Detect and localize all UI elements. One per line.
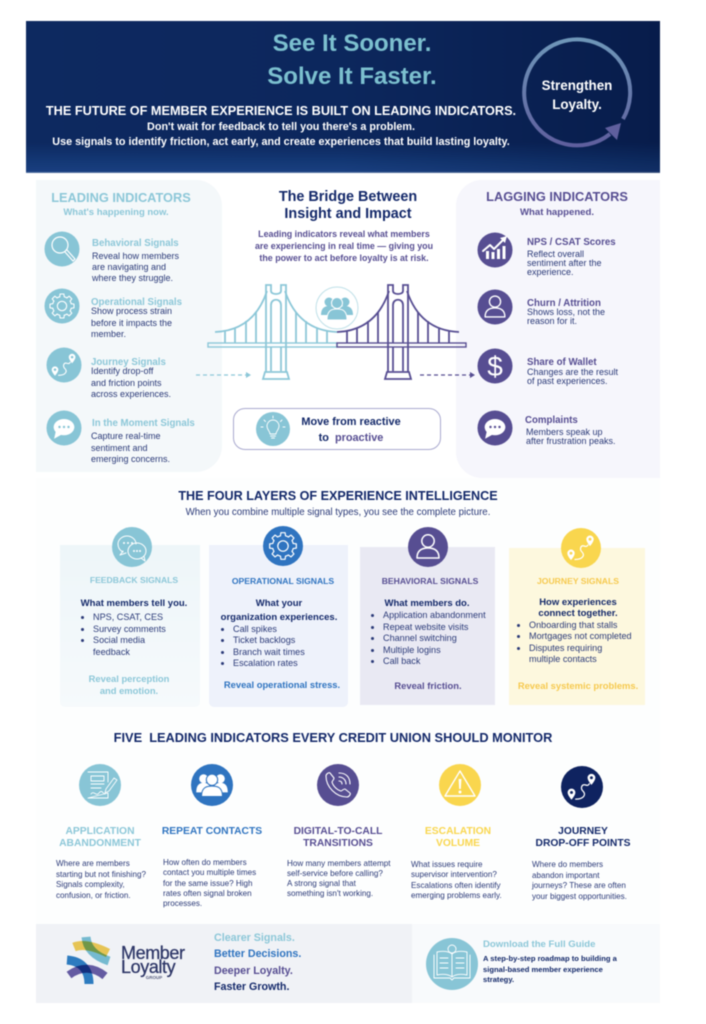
text: processes. <box>163 899 202 908</box>
text: A step-by-step roadmap to building a <box>483 954 617 963</box>
question <box>538 598 618 619</box>
subheading: What happened. <box>520 207 594 218</box>
text <box>287 859 390 899</box>
card: feedback signals <box>60 526 200 696</box>
heading <box>294 826 382 850</box>
text: to proactive <box>319 432 383 444</box>
icon: group in circle <box>315 286 359 330</box>
icon: person <box>476 288 514 326</box>
arrow: into bridge <box>196 372 252 378</box>
text <box>526 307 606 326</box>
tagline: Use signals to identify friction, act early, and create experiences that build lasting loyalty. <box>52 136 510 148</box>
item: complaints <box>476 410 616 446</box>
text <box>411 860 502 902</box>
title <box>267 30 437 90</box>
text: your biggest opportunities. <box>532 892 627 901</box>
list <box>529 620 632 665</box>
card: operational signals <box>209 526 348 707</box>
text: starting but not finishing? <box>56 870 146 879</box>
text <box>526 248 602 278</box>
text: Shows loss, not the <box>527 307 605 317</box>
text: bridge intro: Leading indicators reveal what members <box>258 229 430 239</box>
takeaway: Reveal systemic problems. <box>518 680 638 691</box>
text: sentiment and <box>91 442 148 452</box>
list: Multiple logins <box>383 644 441 654</box>
heading: VOLUME <box>436 838 480 849</box>
question: connect together. <box>538 608 618 618</box>
text: self-service before calling? <box>287 869 383 878</box>
list: Call spikes <box>233 624 277 634</box>
icon: chat <box>46 410 82 446</box>
column: journey drop-off points <box>530 764 645 904</box>
text: bridge intro <box>254 229 434 264</box>
text: Show process strain <box>91 306 172 316</box>
label: Journey Signals <box>91 357 166 368</box>
icon: route <box>46 347 82 383</box>
item: share of wallet <box>476 348 618 386</box>
icon: lightbulb <box>255 411 291 447</box>
heading: bridge <box>278 189 418 222</box>
text: strategy. <box>483 975 514 984</box>
title: See It Sooner. <box>273 30 431 57</box>
takeaway: and emotion. <box>100 685 158 696</box>
label: Complaints <box>525 415 578 426</box>
subheading: What's happening now. <box>63 207 169 218</box>
heading: DROP-OFF POINTS <box>536 838 630 849</box>
heading: APPLICATION <box>65 826 135 837</box>
heading: LEADING INDICATORS <box>51 190 191 205</box>
title: JOURNEY SIGNALS <box>537 576 619 586</box>
text: and friction points <box>91 378 162 388</box>
icon: people <box>191 764 233 806</box>
item: NPS / CSAT <box>476 232 616 278</box>
ring text <box>541 78 612 113</box>
tagline: Don't wait for feedback to tell you there's a problem. <box>147 121 415 133</box>
text: signal-based member experience <box>483 965 603 974</box>
ring text: Loyalty. <box>552 96 602 112</box>
text: of past experiences. <box>527 376 608 386</box>
list: Repeat website visits <box>383 622 468 632</box>
item: operational signals <box>44 288 182 339</box>
wordmark: Member <box>121 943 185 963</box>
heading: four layers: THE FOUR LAYERS OF EXPERIENCE INTELLIGENCE <box>178 489 498 503</box>
label: Behavioral Signals <box>92 238 179 249</box>
heading: LAGGING INDICATORS <box>486 189 628 204</box>
text: member. <box>91 329 126 339</box>
list: Social media <box>93 635 145 645</box>
text: are navigating and <box>92 262 166 272</box>
text: What issues require <box>411 860 483 869</box>
panel: brand footer <box>36 924 412 1003</box>
icon: gear <box>44 288 80 324</box>
icon: chat bubbles <box>112 526 152 568</box>
group: GROUP <box>146 975 162 980</box>
ring text: Strengthen <box>542 78 612 92</box>
text: supervisor intervention? <box>411 870 497 879</box>
icon: gear <box>263 526 303 566</box>
text <box>90 366 171 400</box>
heading <box>425 826 491 850</box>
icon: person <box>408 527 448 567</box>
subheading: four layers: When you combine multiple signal types, you see the complete picture. <box>186 507 490 518</box>
item: journey signals <box>46 347 171 400</box>
question <box>221 597 337 625</box>
text: How many members attempt <box>287 859 390 868</box>
label: NPS / CSAT Scores <box>527 237 616 248</box>
item: in the moment signals <box>46 410 195 465</box>
label: Churn / Attrition <box>527 298 601 309</box>
title: BEHAVIORAL SIGNALS <box>382 576 478 586</box>
icon: loyalty circular arrow <box>522 36 633 148</box>
question: How experiences <box>539 597 617 608</box>
question: What your <box>256 598 302 609</box>
card: journey signals <box>509 528 645 705</box>
callout: reactive to proactive <box>233 408 441 450</box>
text: confusion, or friction. <box>56 891 131 900</box>
column: application abandonment <box>50 764 160 904</box>
list: multiple contacts <box>529 654 597 664</box>
text <box>301 416 401 444</box>
text <box>90 431 170 465</box>
panel: lagging indicators <box>456 180 660 478</box>
icon: route <box>561 766 603 808</box>
icon: warning <box>439 764 481 806</box>
title: OPERATIONAL SIGNALS <box>232 576 334 586</box>
icon: magnifier <box>44 231 80 267</box>
logo: member loyalty group <box>66 934 191 994</box>
slogan: Clearer Signals. <box>214 932 295 944</box>
subtitle: THE FUTURE OF MEMBER EXPERIENCE IS BUILT ON LEADING INDICATORS. <box>46 104 516 118</box>
list: feedback <box>93 646 130 656</box>
label: Operational Signals <box>91 297 182 308</box>
text: Escalations often identify <box>411 881 501 890</box>
icon: chat <box>476 410 514 446</box>
text: experience. <box>527 266 574 276</box>
text: Reflect overall <box>527 248 584 258</box>
text: Members speak up <box>526 427 603 437</box>
text <box>56 859 146 901</box>
text: Identify drop-off <box>91 366 153 376</box>
list <box>383 610 486 668</box>
text: contact you multiple times <box>163 868 256 877</box>
text: Where do members <box>532 860 603 869</box>
heading: Download the Full Guide <box>483 939 595 950</box>
slogan: Faster Growth. <box>214 981 289 993</box>
wordmark: Loyalty <box>121 957 175 977</box>
title: FEEDBACK SIGNALS <box>90 575 178 585</box>
list: NPS, CSAT, CES <box>93 612 163 622</box>
panel: leading indicators <box>36 180 222 472</box>
text: Reveal how members <box>92 250 179 260</box>
slogan <box>214 930 301 996</box>
slogan: Deeper Loyalty. <box>214 965 293 977</box>
text: How often do members <box>163 858 247 867</box>
slogan: Better Decisions. <box>214 948 301 960</box>
text: abandon important <box>532 871 600 880</box>
text: journeys? These are often <box>532 881 626 890</box>
list: Ticket backlogs <box>233 635 295 645</box>
heading <box>536 826 630 850</box>
list: Call back <box>383 656 420 666</box>
text: A strong signal that <box>287 879 356 888</box>
takeaway: Reveal friction. <box>394 680 462 691</box>
takeaway <box>88 673 170 696</box>
item: churn <box>476 288 606 326</box>
heading: JOURNEY <box>558 826 608 837</box>
card: behavioral signals <box>360 527 495 705</box>
text <box>526 427 616 446</box>
icon: dollar <box>476 348 514 384</box>
illustration: bridge <box>206 283 468 381</box>
text: Capture real-time <box>91 431 161 441</box>
arrow: out of bridge <box>419 372 476 378</box>
text <box>532 860 627 902</box>
icon: phone <box>317 764 359 806</box>
text: bridge intro: the power to act before loyalty is at risk. <box>259 253 429 263</box>
icon: chart <box>476 232 514 268</box>
heading: bridge: Insight and Impact <box>284 206 412 222</box>
list: Application abandonment <box>383 610 486 620</box>
text <box>91 250 180 284</box>
text: bridge intro: are experiencing in real time — giving you <box>255 241 433 251</box>
text: sentiment after the <box>527 258 602 268</box>
list: Channel switching <box>383 633 457 643</box>
title: Solve It Faster. <box>267 63 437 90</box>
text: rates often signal broken <box>163 889 252 898</box>
list: Branch wait times <box>233 647 305 657</box>
heading: DIGITAL-TO-CALL <box>294 826 382 837</box>
wordmark <box>121 936 185 975</box>
text: emerging problems early. <box>411 891 502 900</box>
text: Signals complexity, <box>56 880 125 889</box>
column: repeat contacts <box>160 764 270 909</box>
item: behavioral signals <box>44 231 180 284</box>
takeaway: Reveal operational stress. <box>224 679 340 690</box>
list: Disputes requiring <box>529 643 602 653</box>
column: escalation volume <box>408 764 523 904</box>
text: Move from reactive <box>301 416 401 428</box>
list: Mortgages not completed <box>529 631 632 641</box>
logo mark <box>66 934 116 988</box>
list: Onboarding that stalls <box>529 620 617 630</box>
text: emerging concerns. <box>91 454 170 464</box>
text: Changes are the result <box>527 367 618 377</box>
heading: ESCALATION <box>425 826 491 837</box>
heading: REPEAT CONTACTS <box>162 826 262 837</box>
takeaway: Reveal perception <box>89 673 169 684</box>
icon: dollar: $ <box>487 351 503 382</box>
list: Escalation rates <box>233 658 298 668</box>
icon: document <box>79 764 121 806</box>
banner: header <box>26 21 660 173</box>
label: Share of Wallet <box>527 357 597 368</box>
panel: download guide <box>412 924 660 1003</box>
heading <box>59 826 141 850</box>
text <box>163 858 256 909</box>
heading: bridge: The Bridge Between <box>279 189 417 205</box>
text <box>483 954 617 986</box>
list: Survey comments <box>93 624 166 634</box>
list <box>80 612 166 656</box>
text: reason for it. <box>527 316 577 326</box>
text <box>90 306 172 339</box>
tagline <box>52 121 510 148</box>
column: digital-to-call transitions <box>284 764 399 904</box>
text: for the same issue? High <box>163 879 253 888</box>
icon: route <box>561 528 601 568</box>
heading: five indicators: FIVE LEADING INDICATORS EVERY CREDIT UNION SHOULD MONITOR <box>114 730 552 745</box>
text: something isn't working. <box>287 889 373 898</box>
icon: book <box>426 938 478 990</box>
text: before it impacts the <box>91 318 172 328</box>
heading: ABANDONMENT <box>59 838 141 849</box>
text: Where are members <box>56 859 130 868</box>
label: In the Moment Signals <box>92 418 195 429</box>
text <box>526 367 618 386</box>
text: after frustration peaks. <box>526 436 616 446</box>
question: organization experiences. <box>221 612 337 623</box>
text: where they struggle. <box>92 272 173 282</box>
heading: TRANSITIONS <box>303 838 373 849</box>
question: What members tell you. <box>81 598 187 609</box>
list <box>233 624 305 669</box>
text: across experiences. <box>91 389 171 399</box>
question: What members do. <box>384 598 470 609</box>
